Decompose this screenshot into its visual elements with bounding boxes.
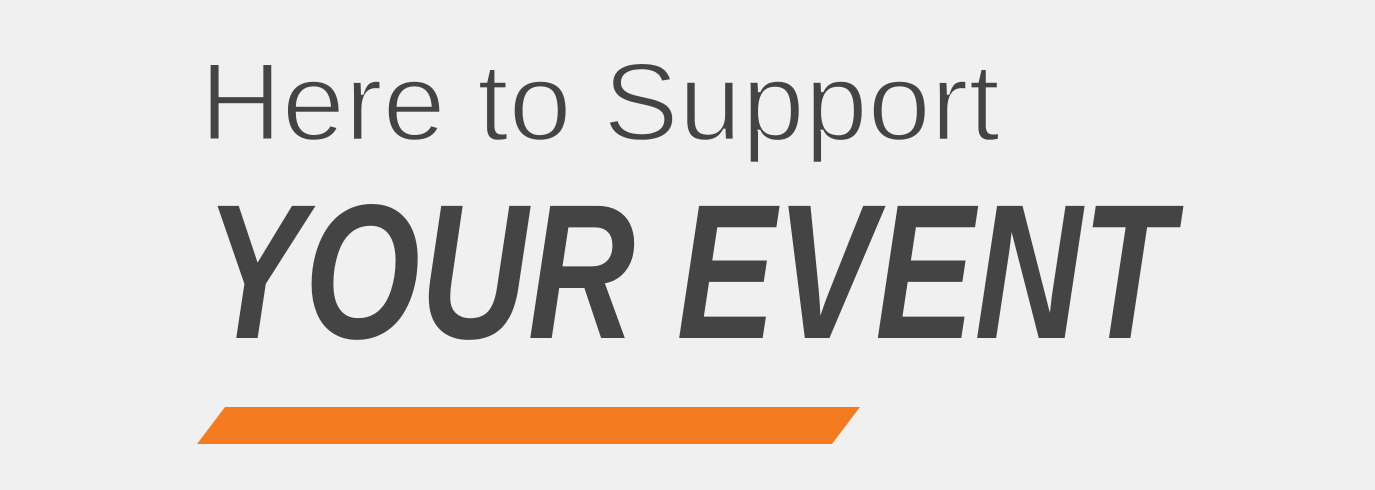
orange accent bar	[197, 407, 860, 444]
title: Here to Support: Here to Support	[200, 41, 1000, 164]
